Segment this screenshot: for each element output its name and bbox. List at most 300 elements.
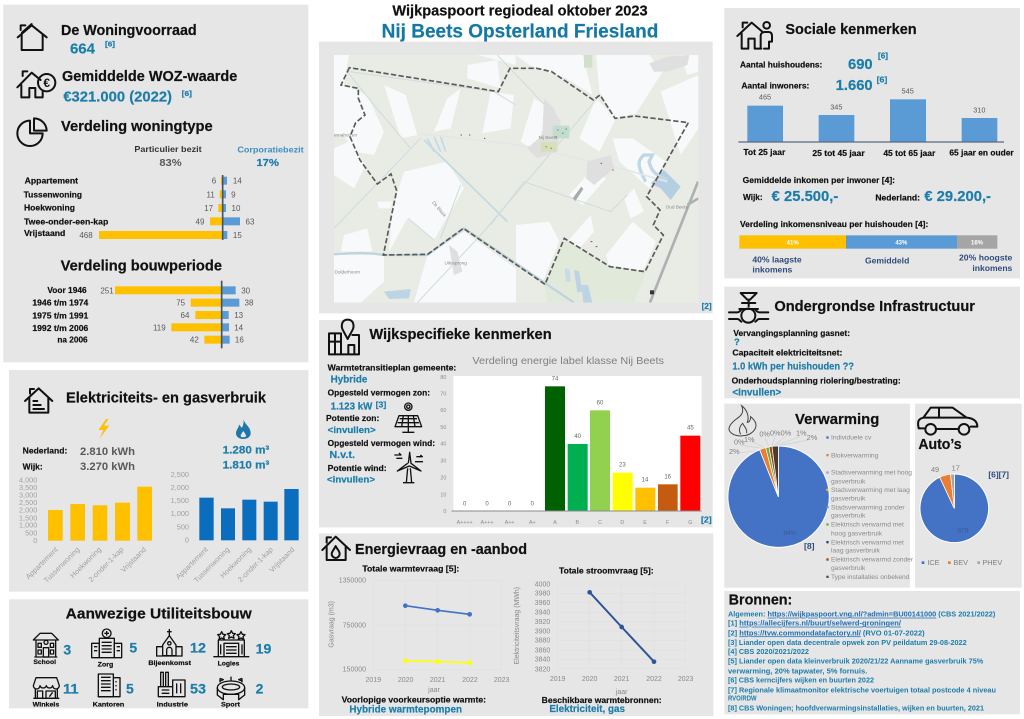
bar chart: leeftijd: Tot 25 jaar xyxy=(743,147,786,157)
bar chart: energielabels: A+ xyxy=(529,520,536,526)
label: logies: Logies xyxy=(218,660,240,667)
pie chart: auto's: 879 xyxy=(957,527,969,534)
map: motorway ramp xyxy=(573,187,583,201)
text block: kenmerken: [3] xyxy=(376,400,387,409)
bar chart: energielabels: G xyxy=(688,520,692,526)
map xyxy=(330,55,698,303)
legend: auto's: PHEV xyxy=(982,558,1002,567)
text block: infrastructuur: Onderhoudsplanning riolering/bestrating: xyxy=(732,375,901,385)
bar chart: energielabels: F xyxy=(666,520,670,526)
bar chart: bouwperiode: 251 xyxy=(100,286,114,295)
icon: pipe valve xyxy=(729,293,768,322)
bar chart: gas: 0 xyxy=(185,536,189,545)
bar chart: energielabels: A++ xyxy=(505,520,515,526)
bar chart: gas: Appartement xyxy=(174,545,210,581)
line chart: stroomvraag: 3900 xyxy=(535,628,550,635)
bar chart: leeftijd: 545 xyxy=(902,86,914,95)
bar chart: energielabels: 0 xyxy=(463,502,467,508)
bar chart: gas xyxy=(171,470,299,585)
bar chart: energielabels: 30 xyxy=(440,459,446,465)
text block: infrastructuur: Vervangingsplanning gasnet: xyxy=(733,328,850,338)
line chart: warmtevraag: 1350000 xyxy=(339,577,366,584)
label: inkomensniveau: Verdeling inkomensniveau per huishouden [4]: xyxy=(740,219,928,229)
icon: lightning bolt xyxy=(98,419,109,439)
stacked bar: inkomensniveau: Gemiddeld xyxy=(865,256,909,265)
bar chart: bouwperiode: 42 xyxy=(190,336,199,345)
bar chart: bouwperiode: 13 xyxy=(234,311,244,320)
bar chart: energielabels: 0 xyxy=(531,502,535,508)
bar chart: elektriciteit: Hoekwoning xyxy=(68,545,103,580)
pie chart: verwarming: 0% xyxy=(770,428,781,437)
line chart: warmtevraag: jaar xyxy=(427,687,440,694)
icon: kantoren xyxy=(98,674,120,697)
label: winkels: Winkels xyxy=(33,701,60,708)
text block: bronnenlijst: Algemeen: https://wijkpaspoort.vng.nl/?admin=BU00141000 (CBS 2021/2022) xyxy=(728,610,996,619)
bar chart: gas: Vrijstaand xyxy=(267,545,296,574)
line chart: stroomvraag: 3880 xyxy=(535,638,550,645)
bar chart: energielabels xyxy=(440,375,702,526)
pie chart: verwarming: 2% xyxy=(729,447,740,456)
heading: Energievraag en -aanbod: Energievraag en -aanbod xyxy=(355,542,527,558)
heading: Wijkspecifieke kenmerken: Wijkspecifieke kenmerken xyxy=(369,327,552,343)
bar chart: woningtype: 15 xyxy=(233,231,242,240)
label: Nederland: Nederland: xyxy=(875,193,920,203)
label: industrie: Industrie xyxy=(157,701,188,708)
line chart: stroomvraag: 2019 xyxy=(550,676,566,683)
icon: house with energy label xyxy=(25,388,52,413)
map: place labels: Nannahuizen xyxy=(330,132,357,137)
map: place labels xyxy=(330,132,688,275)
label: school: School xyxy=(33,659,56,666)
icon: city with map pin xyxy=(329,320,359,354)
line chart: warmtevraag: 2021 xyxy=(430,677,446,684)
heading: Verdeling bouwperiode: Verdeling bouwperiode xyxy=(61,259,222,275)
line chart: stroomvraag: jaar xyxy=(615,689,628,696)
bar chart: leeftijd: 465 xyxy=(759,93,771,102)
text block: bronnenlijst: RVO/RDW xyxy=(728,694,757,703)
legend: verwarming: laag gasverbruik xyxy=(831,548,881,555)
icon: wind turbine xyxy=(394,452,423,483)
panel: wijkspecifieke kenmerken xyxy=(319,320,713,527)
bar chart: energielabels: 0 xyxy=(485,502,489,508)
bar chart: elektriciteit: 2,500 xyxy=(19,498,37,507)
text block: bronnenlijst: [3] Liander open data decentrale opwek zon PV peildatum 29-08-2022 xyxy=(728,638,967,647)
icon: bijeenkomst xyxy=(156,629,183,656)
icon: house with euro xyxy=(17,71,55,97)
bar chart: woningtype: 63 xyxy=(246,217,255,226)
bar chart: gas: 500 xyxy=(177,522,189,531)
legend: verwarming: Blokverwarming xyxy=(831,452,879,459)
panel: auto's xyxy=(915,404,1022,588)
legend: auto's xyxy=(922,558,1002,567)
map: place labels: Nij Beets xyxy=(539,135,558,140)
bar chart: bouwperiode: 1946 t/m 1974 xyxy=(32,298,89,308)
heading: Aanwezige Utiliteitsbouw: Aanwezige Utiliteitsbouw xyxy=(66,606,252,622)
bar chart: energielabels: 70 xyxy=(440,391,446,397)
legend: auto's: ICE xyxy=(927,558,940,567)
heading: Gemiddelde WOZ-waarde: Gemiddelde WOZ-waarde xyxy=(62,69,237,85)
bar chart: bouwperiode: na 2006 xyxy=(57,334,88,344)
bar chart: energielabels: 20 xyxy=(440,475,446,481)
icon detail: valve body xyxy=(741,309,755,323)
value: elektriciteit Nederland: 2.810 kWh xyxy=(80,446,135,458)
panel: woningvoorraad en woningtype xyxy=(3,5,308,362)
bar chart: elektriciteit xyxy=(19,475,152,585)
icon: house with euro: € xyxy=(43,76,50,90)
source: auto's: [6][7] xyxy=(988,471,1009,480)
heading: Ondergrondse Infrastructuur: Ondergrondse Infrastructuur xyxy=(774,299,975,315)
bar chart: elektriciteit: 2-onder-1-kap xyxy=(87,545,125,584)
heading: Verwarming: Verwarming xyxy=(795,412,879,428)
stacked bar: inkomensniveau xyxy=(739,235,1013,274)
value: gas Nederland: 1.280 m³ xyxy=(223,444,270,456)
icon: gas flame xyxy=(236,419,251,439)
value: sport: 2 xyxy=(256,680,264,696)
line chart: warmtevraag: 750000 xyxy=(343,622,366,629)
pie chart: verwarming: 94% xyxy=(783,530,797,537)
label: Wijk: Wijk: xyxy=(23,461,43,471)
bar chart: leeftijd: 345 xyxy=(830,102,842,111)
value: inkomen wijk: € 25.500,- xyxy=(772,189,838,205)
bar chart: elektriciteit: Tussenwoning xyxy=(42,545,81,585)
label: Totale stroomvraag: Totale stroomvraag [5]: xyxy=(559,566,654,576)
label: Particulier bezit: Particulier bezit xyxy=(134,144,202,154)
text block: kenmerken: 1.123 kW xyxy=(331,401,373,412)
bar chart: elektriciteit: 4,000 xyxy=(19,475,37,484)
pie chart: verwarming: 1% xyxy=(796,429,807,438)
source: huishoudens: [6] xyxy=(878,52,888,61)
bar chart: energielabels: A xyxy=(553,520,557,526)
legend: verwarming: Individuele cv xyxy=(831,435,872,442)
panel: energievraag en -aanbod xyxy=(319,533,713,716)
icon: pie xyxy=(17,118,47,146)
pie chart: verwarming xyxy=(728,428,829,547)
bar chart: energielabels: A++++ xyxy=(457,520,473,526)
legend: verwarming: Stadsverwarming met hoog xyxy=(831,470,912,477)
line chart: stroomvraag: 2021 xyxy=(614,676,630,683)
map: building dots xyxy=(461,55,614,247)
label: Corporatiebezit: Corporatiebezit xyxy=(237,144,304,154)
icon: winkels xyxy=(33,678,59,698)
legend: verwarming: gasverbruik xyxy=(831,478,866,485)
legend: auto's: BEV xyxy=(953,558,968,567)
bar chart: energielabels: 0 xyxy=(508,502,512,508)
bar chart: energielabels: A+++ xyxy=(481,520,493,526)
bar chart: elektriciteit: 1,000 xyxy=(19,521,37,530)
line chart: warmtevraag xyxy=(328,577,510,694)
icon: flame outline xyxy=(729,406,756,436)
label: gemiddelde inkomen: Gemiddelde inkomen per inwoner [4]: xyxy=(743,175,895,185)
icon: school xyxy=(33,633,58,657)
bar chart: elektriciteit: 0 xyxy=(33,536,37,545)
bar chart: energielabels: 0 xyxy=(443,509,446,515)
text block: bronnenlijst: [7] Regionale klimaatmonitor elektrische voertuigen totaal postcode 4 niveau xyxy=(728,685,996,694)
legend: verwarming: hoog gasverbruik xyxy=(831,530,883,537)
text block: infrastructuur: Capaciteit elektriciteitsnet: xyxy=(732,348,842,358)
icon: house with flame xyxy=(322,537,350,560)
bar chart: woningtype: 468 xyxy=(79,231,93,240)
legend: verwarming: gasverbruik xyxy=(831,513,866,520)
text block: bronnenlijst xyxy=(728,610,996,713)
text block: kenmerken: Potentie zon: xyxy=(326,413,379,423)
bar chart: energielabels: E xyxy=(643,520,647,526)
line chart: stroomvraag: 3940 xyxy=(535,610,550,617)
bar chart: energielabels: 14 xyxy=(642,478,649,484)
bar chart: elektriciteit: 3,500 xyxy=(19,483,37,492)
text block: bronnenlijst: verwarming, 20% tapwater, 5% fornuis. xyxy=(728,666,867,675)
pie chart: auto's: 17 xyxy=(952,463,960,472)
bar chart: bouwperiode: 119 xyxy=(153,323,166,332)
bar chart: woningtype: 17 xyxy=(204,204,214,213)
map: water xyxy=(334,137,681,303)
text block: bronnenlijst: [1] https://allecijfers.nl/buurt/selwerd-groningen/ xyxy=(728,619,901,628)
source: kaart: [2] xyxy=(702,302,712,311)
bar chart: energielabels: 74 xyxy=(552,377,559,383)
map: wijk boundary xyxy=(341,68,688,284)
source: 6: [6] xyxy=(182,89,192,98)
text block: bronnenlijst: [4] CBS 2020/2021/2022 xyxy=(728,647,809,656)
stacked bar: inkomensniveau: inkomens xyxy=(752,265,793,274)
pie chart: verwarming: 0% xyxy=(759,430,770,439)
icon: house with person xyxy=(737,23,772,49)
text block: infrastructuur: 1.0 kWh per huishouden ?? xyxy=(732,362,854,373)
text block: kenmerken: Opgesteld vermogen wind: xyxy=(328,438,435,448)
heading: Verdeling woningtype: Verdeling woningtype xyxy=(61,119,213,135)
legend: verwarming: Elektrisch verwarmd met xyxy=(831,539,904,546)
text block: kenmerken: Potentie wind: xyxy=(328,463,387,473)
label: bijeenkomst: Bijeenkomst xyxy=(148,660,192,667)
label: kantoren: Kantoren xyxy=(93,701,124,708)
icon: sport xyxy=(217,677,245,700)
bar chart: bouwperiode: Voor 1946 xyxy=(47,285,87,295)
bar chart: woningtype: 6 xyxy=(212,177,217,186)
value: gas wijk: 1.810 m³ xyxy=(223,459,270,471)
heading: Elektriciteits- en gasverbruik: Elektriciteits- en gasverbruik xyxy=(66,391,267,407)
label: warmtebronnen: Beschikbare warmtebronnen: xyxy=(542,695,662,705)
value: zorg: 5 xyxy=(129,639,137,655)
icon: industrie xyxy=(158,672,185,697)
map: villages xyxy=(449,55,689,275)
value: 83%: 83% xyxy=(159,158,182,169)
source: energielabels: [2] xyxy=(701,515,712,524)
panel: ondergrondse infrastructuur xyxy=(724,287,1020,398)
bar chart: elektriciteit: Vrijstaand xyxy=(119,545,148,574)
map: place labels: Uilesprong xyxy=(445,260,467,265)
text block: kenmerken: Warmtetransitieplan gemeente: xyxy=(328,363,456,373)
title: Wijkpaspoort regiodeal oktober 2023: Wijkpaspoort regiodeal oktober 2023 xyxy=(392,3,648,19)
label: Totale warmtevraag: Totale warmtevraag [5]: xyxy=(362,563,459,573)
panel: sociale kenmerken xyxy=(724,8,1020,278)
line chart: stroomvraag: 3820 xyxy=(535,666,550,673)
legend: verwarming xyxy=(826,435,914,581)
map: roads xyxy=(334,55,667,303)
line chart: stroomvraag xyxy=(514,581,694,696)
bar chart: energielabels: 10 xyxy=(440,492,446,498)
value: 17%: 17% xyxy=(256,158,279,169)
value: bijeenkomst: 12 xyxy=(190,639,206,655)
bar chart: woningtype: Vrijstaand xyxy=(24,228,65,238)
bar chart: leeftijd: 45 tot 65 jaar xyxy=(883,148,936,158)
line chart: stroomvraag: 3840 xyxy=(535,657,550,664)
text block: kenmerken: Hybride xyxy=(331,375,368,386)
legend: verwarming: gasverbruik xyxy=(831,496,866,503)
line chart: stroomvraag: 3920 xyxy=(535,619,550,626)
line chart: stroomvraag: 2020 xyxy=(582,676,598,683)
text block: infrastructuur xyxy=(732,328,901,398)
value: kantoren: 5 xyxy=(126,680,134,696)
line chart: warmtevraag: Gasvraag (m3) xyxy=(328,601,335,648)
icon: solar panel xyxy=(395,403,422,432)
panel: bronnen xyxy=(724,591,1020,714)
bar chart: gas: Tussenwoning xyxy=(192,545,231,585)
text block: bronnenlijst: [5] Liander open data kleinverbruik 2020/21/22 Aanname gasverbruik 75% xyxy=(728,657,984,666)
bar chart: leeftijd: 65 jaar en ouder xyxy=(949,148,1014,158)
bar chart: woningtype: 14 xyxy=(233,177,242,186)
bar chart: energielabels: 16 xyxy=(664,475,672,481)
legend: verwarming: gasverbruik xyxy=(831,565,866,572)
line chart: stroomvraag: 3960 xyxy=(535,600,550,607)
value: inwoners: 1.660 xyxy=(836,78,873,94)
icon: logies xyxy=(213,631,249,657)
text block: kenmerken: Opgesteld vermogen zon: xyxy=(328,388,430,398)
pie chart: verwarming: 0% xyxy=(734,438,745,447)
bar chart: bouwperiode: 14 xyxy=(234,323,244,332)
value: huishoudens: 690 xyxy=(848,57,873,73)
bar chart: bouwperiode: 1992 t/m 2006 xyxy=(32,323,89,333)
label: Nederland: Nederland: xyxy=(23,445,67,455)
bar chart: gas: 1,000 xyxy=(171,509,189,518)
line chart: warmtevraag: 150000 xyxy=(343,666,366,673)
label: inwoners: Aantal inwoners: xyxy=(741,81,809,91)
label: sport: Sport xyxy=(221,701,241,708)
bar chart: woningtype: 49 xyxy=(196,217,205,226)
bar chart: bouwperiode: 64 xyxy=(181,311,190,320)
bar chart: woningtype: 10 xyxy=(232,204,241,213)
line chart: stroomvraag: 3860 xyxy=(535,647,550,654)
source: verwarming: [8] xyxy=(804,541,815,551)
pie chart: verwarming: 0% xyxy=(781,428,792,437)
bar chart: woningtype: 11 xyxy=(207,190,215,199)
map: place labels: De Bleek xyxy=(431,200,448,218)
legend: verwarming: Type installaties onbekend xyxy=(831,574,910,581)
bar chart: gas: Hoekwoning xyxy=(218,545,253,580)
icon: car xyxy=(918,408,977,429)
bar chart: leeftijd: 25 tot 45 jaar xyxy=(812,148,865,158)
bar chart: energielabels: 80 xyxy=(440,375,446,381)
bar chart: energielabels: 45 xyxy=(687,426,694,432)
source: 6: [6] xyxy=(105,40,115,49)
label: huishoudens: Aantal huishoudens: xyxy=(740,60,822,70)
bar chart: leeftijd xyxy=(738,86,1014,158)
heading: De Woningvoorraad: De Woningvoorraad xyxy=(61,23,197,39)
bar chart: energielabels: 40 xyxy=(574,434,582,440)
line chart: warmtevraag: 2022 xyxy=(462,677,478,684)
bar chart: bouwperiode: 16 xyxy=(235,336,244,345)
stacked bar: inkomensniveau: 16% xyxy=(971,240,984,246)
legend: verwarming: Stadsverwarming met laag xyxy=(831,487,910,494)
legend: verwarming: Elektrisch verwarmd met xyxy=(831,522,904,529)
bar chart: bouwperiode: 38 xyxy=(245,299,254,308)
map: place labels: Dolderhoorn xyxy=(335,270,361,275)
bar chart: woningtype: Hoekwoning xyxy=(24,203,75,213)
text block: bronnenlijst: [6] CBS kerncijfers wijken en buurten 2022 xyxy=(728,676,874,685)
legend: verwarming: Stadsverwarming zonder xyxy=(831,504,905,511)
text block: bronnenlijst: [8] CBS Woningen; hoofdverwarmingsinstallaties, wijken en buurten, 2021 xyxy=(728,704,984,713)
panel: verwarming xyxy=(724,404,914,588)
bar chart: energielabels: 60 xyxy=(440,408,446,414)
value: school: 3 xyxy=(63,641,71,657)
map: place labels: Oud Beets xyxy=(666,204,688,209)
bar chart: gas: 2,000 xyxy=(171,483,189,492)
bar chart: elektriciteit: 2,000 xyxy=(19,506,37,515)
map: nature area xyxy=(544,238,646,303)
pie chart: verwarming: 1% xyxy=(744,435,755,444)
icon detail: car wheels xyxy=(925,424,969,435)
icon: zorg xyxy=(92,629,122,658)
value: hybride warmtepompen: Hybride warmtepompen xyxy=(349,705,462,716)
line chart: warmtevraag: 2023 xyxy=(494,677,510,684)
heading: Bronnen: Bronnen: xyxy=(729,592,792,608)
pie chart: auto's xyxy=(920,463,989,543)
bar chart: energielabels: C xyxy=(598,520,602,526)
bar chart: elektriciteit: Appartement xyxy=(24,545,60,581)
heading: Sociale kenmerken: Sociale kenmerken xyxy=(785,22,917,38)
line chart: warmtevraag: 2020 xyxy=(398,677,414,684)
bar chart: elektriciteit: 1,500 xyxy=(19,513,37,522)
subtitle: Nij Beets Opsterland Friesland: Nij Beets Opsterland Friesland xyxy=(382,20,658,42)
text block: kenmerken: <invullen> xyxy=(327,474,376,484)
text block: infrastructuur: <Invullen> xyxy=(732,387,782,398)
text block: kenmerken: N.v.t. xyxy=(329,450,355,461)
stacked bar: inkomensniveau: 20% hoogste xyxy=(959,254,1013,263)
line chart: stroomvraag: 4000 xyxy=(535,581,550,588)
icon: house xyxy=(18,24,47,50)
bar chart: energielabels: 40 xyxy=(440,442,446,448)
title block xyxy=(382,3,658,42)
value: winkels: 11 xyxy=(63,680,79,696)
bar chart: woningtype: Twee-onder-een-kap xyxy=(24,216,108,226)
bar chart: energielabels: 23 xyxy=(619,463,626,469)
heading: Auto's: Auto’s xyxy=(918,437,962,453)
pie chart: auto's: 49 xyxy=(931,465,939,474)
bar chart: energielabels: B xyxy=(576,520,580,526)
text block: infrastructuur: ? xyxy=(734,337,740,347)
bar chart: woningtype: 9 xyxy=(231,190,236,199)
value: inkomen Nederland: € 29.200,- xyxy=(924,189,991,205)
label: voorkeursoptie warmte: Voorlopige voorkeursoptie warmte: xyxy=(342,694,486,704)
bar chart: gas: 2-onder-1-kap xyxy=(236,545,275,584)
icon detail: person head xyxy=(763,22,770,29)
line chart: stroomvraag: 3980 xyxy=(535,591,550,598)
value: WOZ: €321.000 (2022) xyxy=(63,90,172,106)
line chart: stroomvraag: Elektriciteitsvraag (MWh) xyxy=(514,587,521,664)
bar chart: energielabels: 60 xyxy=(597,400,604,406)
bar chart: gas: 1,500 xyxy=(171,496,189,505)
legend: verwarming: Elektrisch verwarmd zonder xyxy=(831,557,914,564)
chart title: Verdeling energie label klasse Nij Beets xyxy=(472,356,664,367)
stacked bar: inkomensniveau: inkomens xyxy=(972,264,1013,273)
text block: kenmerken: <invullen> xyxy=(328,425,376,435)
value: industrie: 53 xyxy=(190,680,206,696)
bar chart: bouwperiode: 1975 t/m 1991 xyxy=(32,311,89,321)
bar chart: bouwperiode: 30 xyxy=(241,286,251,295)
bar chart: elektriciteit: 500 xyxy=(25,528,37,537)
bar chart: elektriciteit: 3,000 xyxy=(19,491,37,500)
line chart: stroomvraag: 2022 xyxy=(646,676,662,683)
panel: elektriciteits- en gasverbruik xyxy=(9,370,308,592)
source: inwoners: [6] xyxy=(877,76,888,85)
stacked bar: inkomensniveau: 43% xyxy=(895,240,908,246)
